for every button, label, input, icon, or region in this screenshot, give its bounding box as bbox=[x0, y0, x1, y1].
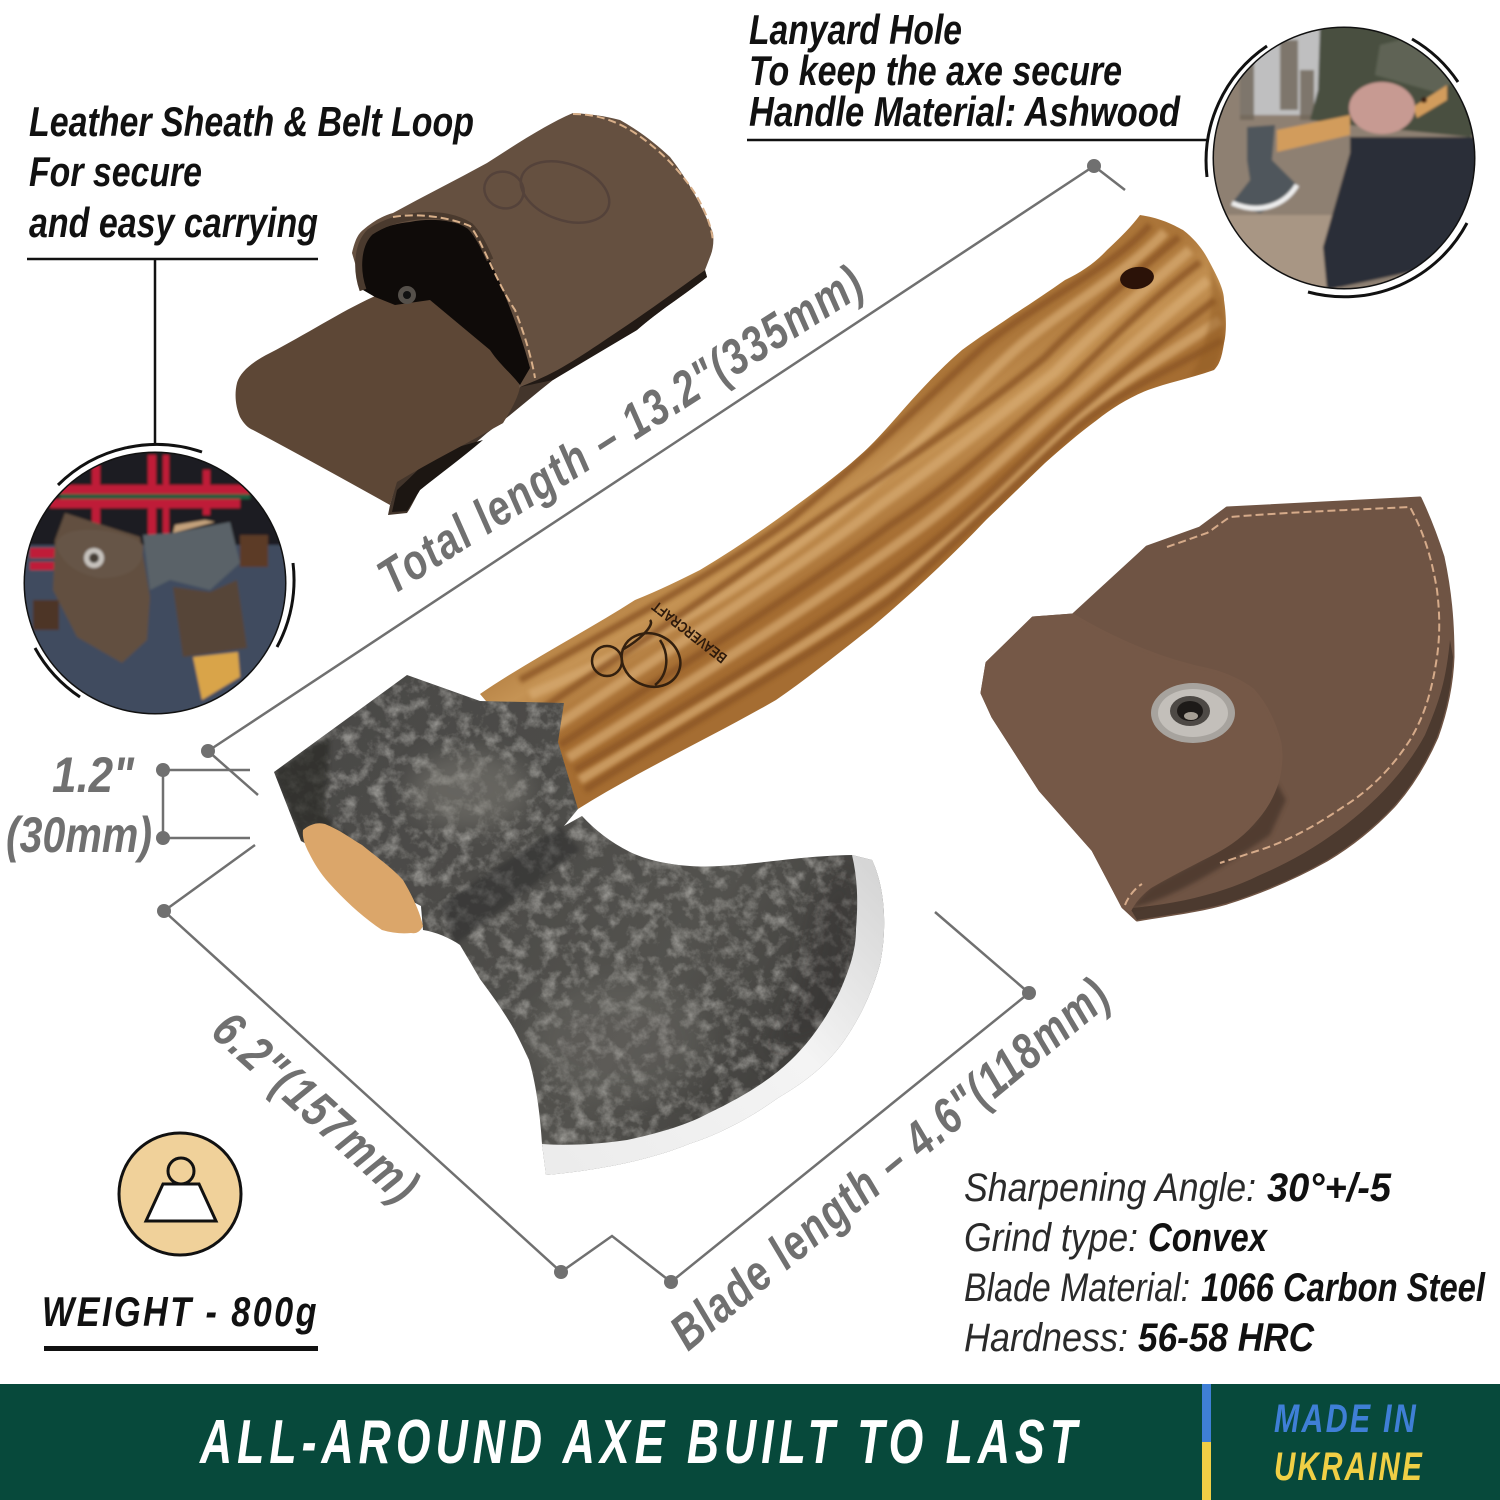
specifications: 30°+/-5 bbox=[1267, 1166, 1392, 1210]
weight label: WEIGHT - 800g bbox=[42, 1288, 319, 1335]
photo: axe in hand bbox=[1210, 25, 1480, 295]
callout: leather sheath: Leather Sheath & Belt Loop bbox=[29, 98, 474, 145]
photo: axe on belt bbox=[20, 450, 292, 720]
weight label bbox=[42, 1288, 319, 1351]
axe handle bbox=[460, 200, 1240, 820]
dimension: head width bbox=[6, 747, 152, 863]
dimension lines bbox=[163, 166, 1125, 1282]
callout: lanyard hole: Lanyard Hole bbox=[749, 6, 962, 53]
photo arcs: belt photo bbox=[35, 444, 294, 697]
dimension: total length: Total length – 13.2"(335mm) bbox=[368, 254, 874, 605]
callout: leather sheath bbox=[27, 98, 474, 445]
callout: leather sheath: and easy carrying bbox=[29, 199, 318, 246]
made in ukraine: MADE IN bbox=[1274, 1397, 1418, 1441]
callout: lanyard hole bbox=[747, 6, 1207, 140]
dimension end dots bbox=[156, 159, 1101, 1289]
specifications: Grind type: bbox=[964, 1216, 1138, 1260]
photo arcs: hand photo bbox=[1206, 39, 1467, 297]
specifications: Blade Material: bbox=[964, 1266, 1190, 1310]
belt sheath bbox=[236, 113, 713, 515]
dimension: blade length: Blade length – 4.6"(118mm) bbox=[659, 966, 1121, 1360]
specifications: 56-58 HRC bbox=[1138, 1316, 1315, 1360]
callout: lanyard hole: To keep the axe secure bbox=[749, 47, 1122, 94]
specifications: Convex bbox=[1148, 1216, 1268, 1260]
specifications: Hardness: bbox=[964, 1316, 1128, 1360]
specifications bbox=[964, 1166, 1486, 1360]
axe head bbox=[274, 675, 884, 1175]
wooden wedge bbox=[303, 823, 423, 933]
made in ukraine bbox=[1274, 1397, 1424, 1489]
footer banner bbox=[0, 1384, 1500, 1500]
callout: lanyard hole: Handle Material: Ashwood bbox=[749, 88, 1181, 135]
icon: weight bbox=[119, 1133, 241, 1255]
axe handle: BEAVERCRAFT bbox=[649, 597, 730, 666]
polished cutting edge bbox=[542, 855, 884, 1175]
dimension: head width: 1.2" bbox=[52, 747, 135, 803]
callout: leather sheath: For secure bbox=[29, 148, 202, 195]
ukraine flag divider bbox=[1202, 1384, 1211, 1500]
waist sheath bbox=[982, 498, 1453, 920]
specifications: Sharpening Angle: bbox=[964, 1166, 1256, 1210]
dimension: head width: (30mm) bbox=[6, 807, 152, 863]
made in ukraine: UKRAINE bbox=[1274, 1445, 1424, 1489]
banner title: ALL-AROUND AXE BUILT TO LAST bbox=[199, 1408, 1082, 1477]
dimension: head height: 6.2"(157mm) bbox=[202, 1001, 431, 1215]
